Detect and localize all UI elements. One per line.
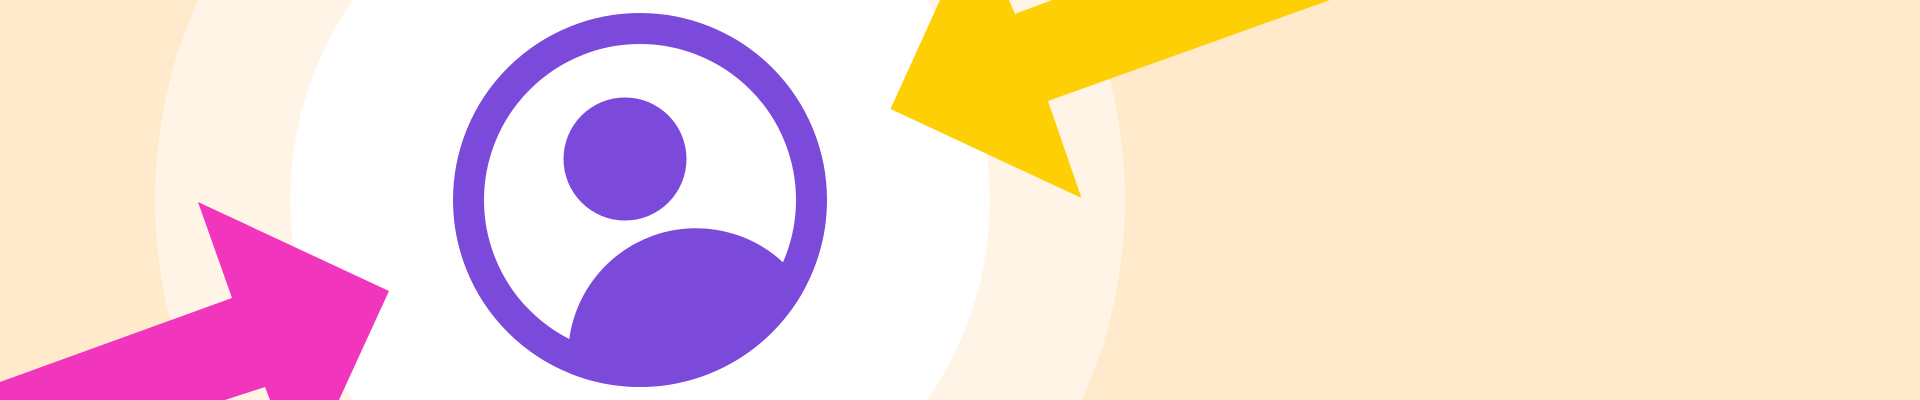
icon: outer ring	[468, 28, 812, 372]
background ring: pale cream circle	[155, 0, 1125, 400]
arrow: pink, pointing up and right	[0, 202, 389, 400]
icon: shoulders	[568, 228, 805, 387]
icon: user profile	[468, 28, 812, 387]
background ring: white circle	[290, 0, 990, 400]
icon: head	[564, 98, 686, 220]
arrow: yellow, pointing down and left	[890, 0, 1330, 198]
